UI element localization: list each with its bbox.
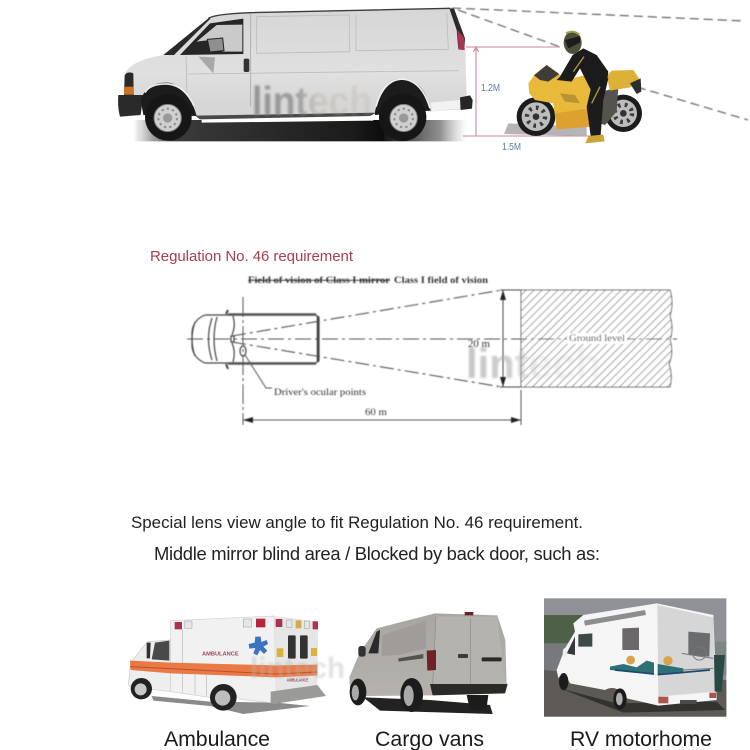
rider <box>557 48 608 136</box>
ambulance front wheel <box>131 678 152 699</box>
photo road <box>544 670 726 717</box>
label: 1.5M: 1.5M <box>502 142 521 153</box>
photo wall <box>544 643 577 670</box>
windshield <box>163 18 211 55</box>
label: 20 m: 20 m <box>468 339 490 350</box>
RV front wheel <box>559 673 568 690</box>
watermark on van: lintech <box>252 78 372 124</box>
front wheel <box>145 94 192 141</box>
vehicle: ambulance <box>128 616 326 714</box>
ambulance rear <box>274 616 318 698</box>
step bumper <box>271 685 326 704</box>
cargo far wheel <box>467 695 488 711</box>
rear handles <box>482 657 502 661</box>
struck-through title: Field of vision of Class I mirror <box>248 275 391 286</box>
door window <box>180 19 243 55</box>
photo hill <box>544 615 583 643</box>
rear windows <box>288 635 296 659</box>
fairing <box>528 65 595 129</box>
heading: regulation requirement: Regulation No. 46 requirement <box>150 248 354 265</box>
bike rack <box>682 647 713 670</box>
label: driver's ocular points: Driver's ocular points <box>274 388 366 398</box>
label: 60 m: 60 m <box>365 408 388 418</box>
label: 1.2M: 1.2M <box>481 83 500 94</box>
ocular point vertical line <box>242 297 244 425</box>
cab window <box>368 630 380 653</box>
centre line <box>187 338 677 340</box>
watermark on ambulance: lintech <box>250 652 345 685</box>
label background and ground level text: Ground level <box>569 334 625 344</box>
motorcycle and rider <box>504 31 642 143</box>
door handle <box>244 59 249 72</box>
ambulance cab <box>128 640 171 692</box>
side panel creases <box>186 13 458 110</box>
van rear view cone dashed lines <box>452 8 748 120</box>
ambulance box side <box>171 616 277 703</box>
ambulance shadow <box>152 696 310 714</box>
van roof edge <box>208 8 450 18</box>
decor stripes <box>610 656 710 675</box>
van body <box>124 8 467 116</box>
rear bumper <box>430 684 508 695</box>
RV rear wall <box>657 605 715 697</box>
van shadow <box>133 120 467 141</box>
RV body <box>557 603 717 706</box>
roof lights <box>175 619 318 657</box>
rear panel <box>433 617 505 685</box>
cargo front wheel <box>350 679 366 705</box>
driver's ocular points leader <box>245 355 272 388</box>
door shadow <box>198 57 215 73</box>
bin <box>714 655 725 692</box>
awning <box>584 610 646 626</box>
mirror <box>207 38 224 52</box>
watermark on diagram: lintech <box>466 340 601 387</box>
cargo shadow <box>363 697 493 714</box>
field of view dashed lines <box>232 290 502 387</box>
RV rear wheel <box>613 688 627 710</box>
hatched ground area <box>521 290 672 387</box>
rear pillar and tail light <box>449 8 465 50</box>
ambulance lettering: AMBULANCE <box>202 651 239 657</box>
60 m dimension <box>243 390 521 425</box>
motorcycle rear wheel <box>605 95 642 132</box>
cargo body <box>349 613 507 696</box>
diagram title <box>248 275 489 286</box>
cargo side rear wheel <box>400 678 423 712</box>
ground shadow <box>504 123 587 136</box>
photo sky <box>544 598 726 717</box>
orange stripe <box>130 661 317 677</box>
tail section <box>607 70 640 91</box>
rear bumper <box>460 95 473 110</box>
RV mirror <box>563 648 567 657</box>
windscreen <box>534 65 559 82</box>
wheel arches <box>141 83 197 116</box>
motorcycle front wheel <box>517 97 555 136</box>
vehicle plan view <box>192 310 319 369</box>
RV shadow <box>560 688 725 713</box>
side window <box>382 621 426 656</box>
rear lettering: AMBULANCE <box>287 678 308 683</box>
ambulance rear wheel <box>210 684 237 711</box>
RV lights <box>658 697 668 703</box>
helmet <box>564 31 582 54</box>
RV windows <box>622 628 639 650</box>
headlight <box>124 72 134 95</box>
height and distance dimension lines <box>463 47 590 136</box>
rear wheel <box>379 94 426 141</box>
tail light <box>427 650 436 671</box>
corrected title: Class I field of vision <box>394 275 489 286</box>
vehicle: RV motorhome photo <box>544 598 726 717</box>
text: special lens note: Special lens view angle to fit Regulation No. 46 requirement. <box>131 513 583 532</box>
sill <box>195 104 377 116</box>
front bumper <box>118 95 143 117</box>
side door lines <box>183 629 207 696</box>
vehicle: cargo van <box>349 612 508 714</box>
rider torso and arm <box>557 48 608 92</box>
van <box>118 8 473 141</box>
engine <box>593 87 618 125</box>
diagram: class I field of vision <box>187 275 677 425</box>
rider leg <box>587 78 608 136</box>
figure: van with motorcycle in blind area <box>118 8 748 153</box>
20 m dimension <box>500 290 521 387</box>
text: blind area note: Middle mirror blind area / Blocked by back door, such as: <box>154 543 600 564</box>
star of life <box>249 637 268 655</box>
boot <box>585 135 605 143</box>
gap beneath sill <box>202 115 373 123</box>
